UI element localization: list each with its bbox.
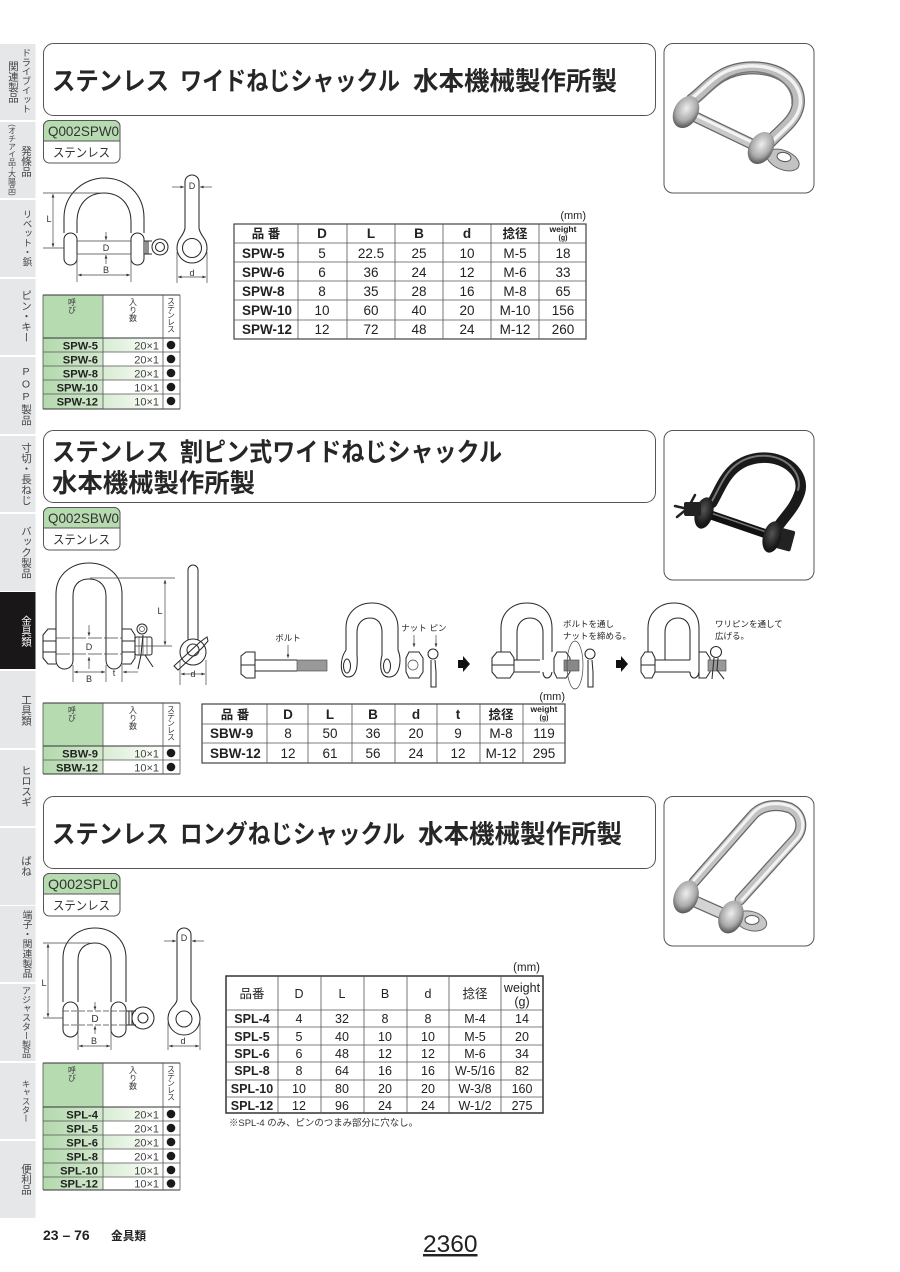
spec table: SBW: SBW-9 [210, 726, 253, 741]
spec table: SPW [234, 210, 586, 339]
product code tag: SPL: ステンレス [53, 899, 110, 913]
diagram: split-pin shackle dimensions [43, 563, 208, 685]
quantity table: SPW: SPW-10 [57, 382, 98, 394]
spec table: SBW: 8 [284, 726, 292, 741]
spec table: SPL: 64 [335, 1064, 349, 1078]
spec table: SBW: SBW-12 [210, 746, 261, 761]
diagram: wide shackle dimensions: B [103, 265, 109, 275]
spec table: SPL: 48 [335, 1047, 349, 1061]
spec table: SPL: 6 [296, 1047, 303, 1061]
quantity table: SPW: SPW-6 [63, 354, 98, 366]
spec table: SPL: SPL-8 [234, 1064, 270, 1078]
quantity table: SPL: SPL-10 [60, 1166, 98, 1178]
product code tag: SPL: Q002SPL0 [48, 876, 118, 892]
spec table: SPW: B [414, 226, 424, 241]
spec table: SPW: 24 [411, 265, 427, 280]
spec table: SPL: (g) [514, 995, 530, 1009]
sidebar navigation tabs: 便利品 [20, 1162, 32, 1195]
quantity table: SPW: 20×1 [134, 340, 159, 352]
spec table: SPL: 24 [378, 1099, 392, 1113]
title: wide screw shackle: ワイドねじシャックル [180, 68, 400, 96]
diagram: long shackle dimensions: D [91, 1014, 99, 1025]
spec table: SPW: 72 [363, 322, 379, 337]
product code tag: SBW: Q002SBW0 [48, 510, 119, 526]
spec table: SBW: 24 [408, 746, 424, 761]
spec table: SBW: 295 [533, 746, 555, 761]
spec table: SPL: 品番 [239, 987, 265, 1001]
spec table: SPL: 16 [421, 1064, 435, 1078]
spec table: SPL: 12 [378, 1047, 392, 1061]
sidebar navigation tabs: 工具類 [20, 694, 32, 726]
diagram: wide shackle dimensions: D [189, 181, 196, 191]
diagram: split-pin shackle dimensions: d [190, 669, 196, 679]
quantity table: SPW: SPW-12 [57, 396, 98, 408]
assembled with bolt and nut: ナットを締める。 [563, 631, 631, 641]
spec table: SBW: 61 [322, 746, 338, 761]
title: split-pin wide screw shackle: 水本機械製作所製 [52, 470, 255, 498]
assembled with bolt and nut [492, 603, 631, 689]
spec table: SPW: 48 [411, 322, 427, 337]
spec table: SPW: 24 [459, 322, 475, 337]
shackle body [341, 603, 400, 677]
title: long screw shackle: ステンレス [52, 821, 169, 849]
spec table: SBW: 56 [365, 746, 381, 761]
photo: stainless wide shackle [664, 44, 814, 193]
quantity table: SPL: ステンレス [166, 1065, 176, 1101]
spec table: SPW: SPW-5 [242, 246, 285, 261]
quantity table: SPW: 20×1 [134, 368, 159, 380]
diagram: long shackle dimensions [41, 928, 204, 1050]
sidebar navigation tabs: 端子・関連製品 [20, 908, 32, 979]
quantity table: SPL: 20×1 [134, 1124, 159, 1136]
spec table: SPW: 5 [318, 246, 326, 261]
quantity table: SPL: 20×1 [134, 1110, 159, 1122]
quantity table: SPW: 10×1 [134, 396, 159, 408]
spec table: SPL: d [425, 987, 432, 1001]
quantity table: SPL: SPL-6 [66, 1138, 98, 1150]
spec table: SPL: 12 [292, 1099, 306, 1113]
quantity table: SBW: SBW-12 [56, 762, 98, 774]
spec table: SPL: D [294, 987, 304, 1001]
assembled with split pin [641, 603, 783, 679]
spec table: SPW: M-8 [503, 284, 527, 299]
quantity table: SPL: 10×1 [134, 1166, 159, 1178]
sidebar navigation tabs: ドライブイット [20, 48, 32, 114]
diagram: wide shackle dimensions: L [46, 214, 52, 224]
diagram: long shackle dimensions: B [91, 1036, 97, 1046]
spec table: SPL: M-4 [464, 1012, 486, 1026]
spec table: SPW: SPW-12 [242, 322, 292, 337]
spec table: SPL: 捻径 [462, 987, 488, 1001]
spec table: SPL: 10 [378, 1030, 392, 1044]
spec table: SPL [226, 962, 543, 1113]
spec table: SPW: 6 [318, 265, 326, 280]
spec table: SBW: 50 [322, 726, 338, 741]
spec table: SPW: M-5 [503, 246, 527, 261]
diagram: split-pin shackle dimensions: D [86, 642, 93, 652]
title: split-pin wide screw shackle: 割ピン式ワイドねじシャックル [180, 439, 502, 467]
quantity table: SPW [43, 295, 180, 409]
spec table: SPW: 8 [318, 284, 326, 299]
spec table: SBW: L [326, 707, 334, 722]
footer: section reference: 金具類 [111, 1229, 146, 1243]
diagram: wide shackle dimensions: d [189, 268, 195, 278]
sidebar navigation tabs: アジャスター製品 [21, 986, 31, 1059]
quantity table: SPW: 入り数 [128, 298, 138, 323]
spec table: SPL: W-3/8 [458, 1082, 492, 1096]
spec table: SPL: 16 [378, 1064, 392, 1078]
title: wide screw shackle: ステンレス [52, 68, 169, 96]
spec table: SPW: SPW-10 [242, 303, 292, 318]
spec table: SPW: 25 [411, 246, 427, 261]
spec table: SPW: D [317, 226, 327, 241]
title: wide screw shackle: 水本機械製作所製 [413, 68, 617, 96]
title: long screw shackle: ロングねじシャックル [180, 820, 405, 849]
quantity table: SBW: 呼び [68, 705, 76, 722]
spec table: SPW: 35 [363, 284, 379, 299]
quantity table: SBW: SBW-9 [62, 748, 98, 760]
quantity table: SPW: 10×1 [134, 382, 159, 394]
quantity table: SPL: 入り数 [128, 1066, 138, 1091]
quantity table: SBW [43, 703, 180, 774]
diagram: split-pin shackle dimensions: L [157, 606, 163, 616]
quantity table: SPL: 10×1 [134, 1178, 159, 1190]
spec table: SPW: 36 [363, 265, 379, 280]
assembled with split pin: ワリピンを通して [715, 619, 783, 629]
spec table: SPW: M-10 [500, 303, 530, 318]
title: wide screw shackle [44, 44, 656, 116]
diagram: wide shackle dimensions: D [103, 243, 110, 253]
assembled with split pin: 広げる。 [715, 631, 749, 641]
spec table: SPW: 捻径 [502, 226, 528, 241]
spec table: SPL: 20 [421, 1082, 435, 1096]
spec table: SPL: 82 [515, 1064, 529, 1078]
spec table: SPL: 10 [292, 1082, 306, 1096]
spec table: SPL: SPL-12 [231, 1099, 273, 1113]
spec table: SBW: weight [530, 704, 558, 714]
quantity table: SPL [43, 1063, 180, 1190]
spec table: SPL: B [381, 987, 389, 1001]
spec table: SPW: M-6 [503, 265, 527, 280]
spec table: SPW: 260 [552, 322, 574, 337]
spec table: SBW: D [283, 707, 293, 722]
spec table: SPL: 32 [335, 1012, 349, 1026]
spec table: SBW: 36 [365, 726, 381, 741]
spec table: SBW: 捻径 [488, 707, 514, 722]
quantity table: SBW: 入り数 [128, 706, 138, 731]
diagram: split-pin shackle dimensions: t [113, 668, 116, 678]
spec table: SBW: (mm) [539, 691, 565, 703]
spec table: SPL: M-6 [464, 1047, 486, 1061]
spec table: SPL: 160 [512, 1082, 532, 1096]
spec table: SBW: d [412, 707, 420, 722]
footer: section reference [43, 1227, 146, 1243]
spec table: SPW: 65 [555, 284, 571, 299]
sidebar navigation tabs: キャスター [21, 1080, 31, 1122]
arrow: step 2 [616, 656, 628, 672]
spec table: SPW: weight [549, 224, 577, 234]
quantity table: SBW: 10×1 [134, 762, 159, 774]
spec table: SPW: SPW-8 [242, 284, 285, 299]
quantity table: SPL: SPL-5 [66, 1124, 98, 1136]
assembled with bolt and nut: ボルトを通し [563, 619, 614, 629]
quantity table: SPW: SPW-5 [63, 340, 98, 352]
product code tag: SPW [44, 120, 120, 163]
spec table: SBW: 9 [454, 726, 462, 741]
spec table: SPW: 18 [555, 246, 571, 261]
spec table: SPW: d [463, 226, 471, 241]
diagram: split-pin shackle dimensions: B [86, 674, 92, 684]
spec table: SPW: 12 [314, 322, 330, 337]
spec table: SPL: 12 [421, 1047, 435, 1061]
spec table: SPL: 10 [421, 1030, 435, 1044]
spec table: SPL: M-5 [464, 1030, 486, 1044]
spec table: SPW: 10 [314, 303, 330, 318]
quantity table: SPW: 呼び [68, 297, 76, 314]
quantity table: SPW: ステンレス [166, 297, 176, 333]
spec table: SPW: 20 [459, 303, 475, 318]
product code tag: SPL [44, 874, 120, 916]
spec table: SPL: 20 [378, 1082, 392, 1096]
quantity table: SPW: 20×1 [134, 354, 159, 366]
spec table: SPW: 22.5 [358, 246, 384, 261]
quantity table: SPL: 20×1 [134, 1138, 159, 1150]
quantity table: SPL: 20×1 [134, 1152, 159, 1164]
sidebar navigation tabs: 金具類 [20, 614, 32, 647]
spec table: SBW: (g) [540, 715, 548, 722]
quantity table: SPL: SPL-4 [66, 1110, 99, 1122]
spec table: SPW: 28 [411, 284, 427, 299]
sidebar navigation tabs: 発條品 [20, 144, 32, 177]
spec table: SPL: W-5/16 [455, 1064, 495, 1078]
title: long screw shackle [44, 796, 656, 868]
spec table: SBW: 119 [533, 726, 555, 741]
diagram: wide shackle dimensions [43, 175, 212, 283]
bolt: ボルト [275, 633, 301, 643]
sidebar navigation tabs [0, 44, 36, 1218]
title: split-pin wide screw shackle [44, 430, 656, 502]
product code tag: SBW: ステンレス [53, 533, 110, 547]
spec table: SPL: 8 [425, 1012, 432, 1026]
spec table: SBW: M-8 [489, 726, 513, 741]
spec table: SPL: 34 [515, 1047, 529, 1061]
spec table: SPL: 5 [296, 1030, 303, 1044]
sidebar navigation tabs: (オチアイ品･大陽品) [7, 124, 16, 196]
spec table: SPL: W-1/2 [458, 1099, 492, 1113]
product code tag: SPW: ステンレス [53, 146, 110, 160]
spec table: SPW: 12 [459, 265, 475, 280]
spec table: SPL: SPL-4 [234, 1012, 270, 1026]
spec table: SPL: SPL-10 [231, 1082, 273, 1096]
spec table: SPL: 40 [335, 1030, 349, 1044]
nut and pin: ピン [429, 623, 447, 633]
quantity table: SPW: SPW-8 [63, 368, 98, 380]
spec table: SPW: 10 [459, 246, 475, 261]
diagram: long shackle dimensions: d [180, 1036, 186, 1046]
spec table: SPL: weight [503, 981, 541, 995]
spec table: SPW: (g) [559, 235, 567, 242]
spec table: SPL: (mm) [513, 962, 540, 974]
spec table: SPL: 24 [421, 1099, 435, 1113]
spec table: SBW [202, 691, 565, 763]
spec table: SPL: 8 [382, 1012, 389, 1026]
spec table: SPL: 4 [296, 1012, 303, 1026]
diagram: long shackle dimensions: D [181, 933, 188, 943]
spec table: SPW: 60 [363, 303, 379, 318]
spec table: SPL: 20 [515, 1030, 529, 1044]
sidebar navigation tabs: 寸切・長ねじ [20, 442, 32, 506]
footnote: ※SPL-4 のみ、ピンのつまみ部分に穴なし。 [229, 1118, 418, 1129]
assembly steps diagram [241, 603, 783, 689]
quantity table: SPL: SPL-12 [60, 1178, 98, 1190]
spec table: SPL: SPL-5 [234, 1030, 270, 1044]
product code tag: SBW [44, 508, 120, 550]
spec table: SPW: 156 [552, 303, 574, 318]
spec table: SBW: 12 [450, 746, 466, 761]
spec table: SBW: M-12 [486, 746, 516, 761]
sidebar navigation tabs: ピン・キー [20, 290, 32, 342]
spec table: SPW: 16 [459, 284, 475, 299]
diagram: long shackle dimensions: L [41, 978, 47, 988]
photo: stainless long shackle [664, 796, 814, 946]
arrow: step 1 [458, 656, 470, 672]
product code tag: SPW: Q002SPW0 [48, 123, 119, 139]
spec table: SPW: 40 [411, 303, 427, 318]
page number: 2360 [423, 1231, 478, 1258]
spec table: SPL: L [339, 987, 346, 1001]
sidebar navigation tabs: POP製品 [20, 366, 32, 426]
spec table: SPW: L [367, 226, 375, 241]
spec table: SBW: 20 [408, 726, 424, 741]
spec table: SPW: 33 [555, 265, 571, 280]
spec table: SBW: t [456, 707, 461, 722]
sidebar navigation tabs: 関連製品 [7, 61, 19, 104]
quantity table: SPL: 呼び [68, 1065, 76, 1082]
sidebar navigation tabs: ヒロスギ [20, 765, 32, 807]
bolt [241, 633, 327, 678]
quantity table: SBW: ステンレス [166, 705, 176, 741]
nut and pin [401, 623, 447, 687]
title: long screw shackle: 水本機械製作所製 [418, 821, 622, 849]
spec table: SPW: M-12 [500, 322, 530, 337]
sidebar navigation tabs: リベット・鋲 [20, 210, 32, 267]
spec table: SPL: 14 [515, 1012, 529, 1026]
photo: black split-pin shackle [664, 430, 814, 580]
spec table: SPL: 96 [335, 1099, 349, 1113]
spec table: SPW: 品 番 [252, 227, 281, 241]
spec table: SPL: SPL-6 [234, 1047, 270, 1061]
footer: section reference: 23 – 76 [43, 1227, 90, 1243]
quantity table: SBW: 10×1 [134, 748, 159, 760]
spec table: SPW: SPW-6 [242, 265, 285, 280]
spec table: SBW: 12 [280, 746, 296, 761]
spec table: SBW: 品 番 [221, 708, 250, 722]
spec table: SPL: 80 [335, 1082, 349, 1096]
spec table: SBW: B [368, 707, 378, 722]
title: split-pin wide screw shackle: ステンレス [52, 439, 169, 467]
sidebar navigation tabs: ばね [20, 856, 32, 876]
quantity table: SPL: SPL-8 [66, 1152, 98, 1164]
nut and pin: ナット [401, 623, 427, 633]
spec table: SPL: 275 [512, 1099, 532, 1113]
spec table: SPL: 8 [296, 1064, 303, 1078]
spec table: SPW: (mm) [560, 210, 586, 222]
sidebar navigation tabs: バック製品 [20, 526, 32, 579]
